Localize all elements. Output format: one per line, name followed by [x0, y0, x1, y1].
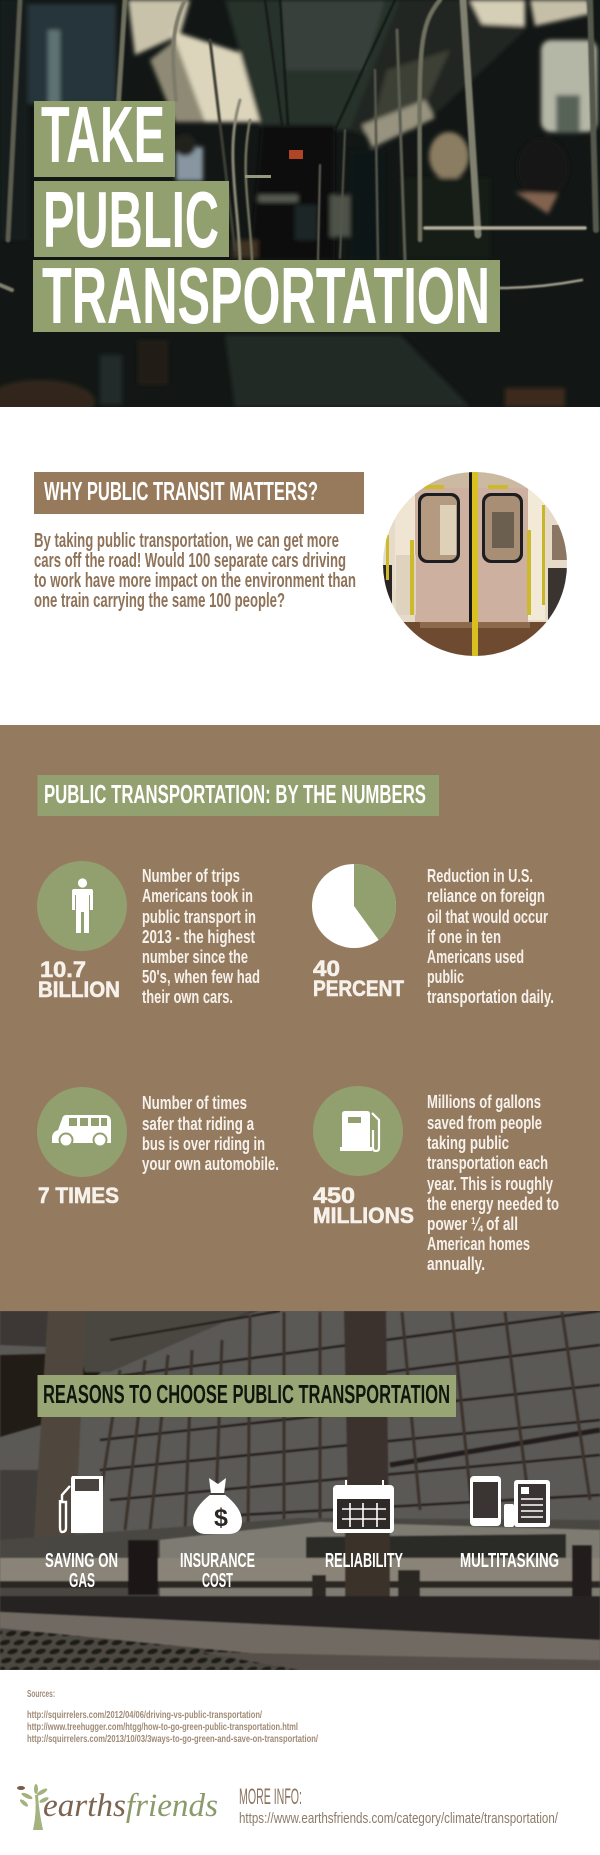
text block: safety description	[142, 1093, 279, 1174]
stat: 10.7 billion: BILLION	[38, 977, 120, 1002]
reason: insurance cost	[180, 1478, 255, 1592]
icon: tree	[17, 1784, 49, 1830]
icon: bus in circle	[37, 1087, 127, 1177]
icon: fuel pump in circle	[313, 1086, 403, 1176]
text block: trips description	[142, 866, 260, 1007]
stat: 450 millions: 450	[313, 1183, 355, 1208]
text block: oil reliance description: reliance on foreign	[427, 886, 545, 906]
text block: safety description: safer that riding a	[142, 1114, 255, 1134]
text block: oil reliance description: Americans used	[427, 947, 524, 967]
text block: oil reliance description: Reduction in U.S.	[427, 866, 533, 886]
text block: why transit matters body	[34, 530, 356, 612]
reason: reliability: RELIABILITY	[325, 1550, 403, 1572]
text block: why transit matters body: one train carrying the same 100 people?	[34, 590, 285, 612]
icon: money bag: $	[214, 1504, 228, 1532]
text block: gallons description: taking public	[427, 1133, 509, 1153]
text block: more info: MORE INFO:	[239, 1784, 302, 1809]
stat: 10.7 billion	[37, 861, 260, 1007]
panel: train station photo	[0, 1311, 600, 1670]
reason: reliability	[325, 1480, 403, 1572]
text block: oil reliance description: transportation daily.	[427, 987, 554, 1007]
title: PUBLIC label: PUBLIC	[43, 175, 219, 264]
title: TAKE label	[34, 90, 175, 179]
text block: sources: http://squirrelers.com/2013/10/03/3ways-to-go-green-and-save-on-transportation/	[27, 1734, 318, 1745]
chart: 40 percent pie	[312, 864, 396, 948]
text block: trips description: Americans took in	[142, 886, 253, 906]
icon: calendar	[333, 1480, 394, 1533]
reason: saving on gas: GAS	[69, 1570, 95, 1592]
text block: sources: http://squirrelers.com/2012/04/06/driving-vs-public-transportation/	[27, 1710, 262, 1721]
text block: sources	[27, 1689, 318, 1745]
text block: more info	[239, 1784, 559, 1827]
text block: gallons description: annually.	[427, 1254, 485, 1274]
text block: safety description: bus is over riding in	[142, 1134, 265, 1154]
text block: why transit matters body: By taking public transportation, we can get more	[34, 530, 339, 552]
text block: why transit matters body: to work have more impact on the environment than	[34, 570, 356, 592]
text block: oil reliance description: if one in ten	[427, 927, 501, 947]
reason: insurance cost: COST	[202, 1570, 233, 1592]
reason: insurance cost: INSURANCE	[180, 1550, 255, 1572]
panel: by the numbers	[0, 725, 600, 1311]
stat: 40 percent: 40	[313, 956, 340, 981]
text block: gallons description: year. This is roughly	[427, 1174, 553, 1194]
text block: trips description: public transport in	[142, 907, 256, 927]
stat: 10.7 billion: 10.7	[40, 957, 86, 982]
text block: oil reliance description: public	[427, 967, 464, 987]
heading: reasons to choose	[38, 1375, 456, 1417]
reason: multitasking	[460, 1476, 559, 1572]
text block: gallons description: saved from people	[427, 1113, 542, 1133]
stat: 7 times	[37, 1087, 279, 1208]
reason: saving on gas	[45, 1476, 118, 1592]
logo: earthsfriends	[17, 1784, 218, 1830]
stat: 450 millions: MILLIONS	[313, 1203, 414, 1228]
reason: saving on gas: SAVING ON	[45, 1550, 118, 1572]
text block: gallons description	[427, 1092, 559, 1274]
text block: why transit matters body: cars off the road! Would 100 separate cars driving	[34, 550, 346, 572]
stat: 40 percent	[312, 864, 554, 1007]
panel: hero bus interior photo	[0, 0, 600, 424]
heading: by the numbers	[38, 775, 439, 816]
text block: oil reliance description: oil that would occur	[427, 907, 548, 927]
text block: gallons description: transportation each	[427, 1153, 548, 1173]
text block: trips description: 50's, when few had	[142, 967, 260, 987]
icon: person in circle	[37, 861, 127, 951]
text block: gallons description: Millions of gallons	[427, 1092, 541, 1112]
text block: gallons description: American homes	[427, 1234, 530, 1254]
text block: safety description: your own automobile.	[142, 1154, 279, 1174]
heading: why public transit matters	[34, 472, 364, 514]
logo: earthsfriends: earthsfriends	[43, 1788, 218, 1824]
text block: trips description: their own cars.	[142, 987, 233, 1007]
heading: why public transit matters: WHY PUBLIC TRANSIT MATTERS?	[44, 476, 318, 506]
text block: oil reliance description	[427, 866, 554, 1007]
title: TAKE label: TAKE	[41, 90, 165, 179]
text block: sources: http://www.treehugger.com/htgg/how-to-go-green-public-transportation.html	[27, 1722, 298, 1733]
stat: 450 millions	[313, 1086, 559, 1274]
text block: gallons description: power ¼ of all	[427, 1214, 518, 1234]
icon: gas pump	[60, 1476, 103, 1533]
text block: trips description: number since the	[142, 947, 248, 967]
image: round photo of train doors	[383, 472, 567, 656]
icon: phone and tablet	[470, 1476, 550, 1527]
text block: sources: Sources:	[27, 1689, 55, 1700]
text block: safety description: Number of times	[142, 1093, 247, 1113]
title: PUBLIC label	[34, 175, 229, 264]
text block: trips description: Number of trips	[142, 866, 240, 886]
text block: trips description: 2013 - the highest	[142, 927, 255, 947]
stat: 7 times: 7 TIMES	[38, 1183, 119, 1208]
stat: 40 percent: PERCENT	[313, 976, 404, 1001]
